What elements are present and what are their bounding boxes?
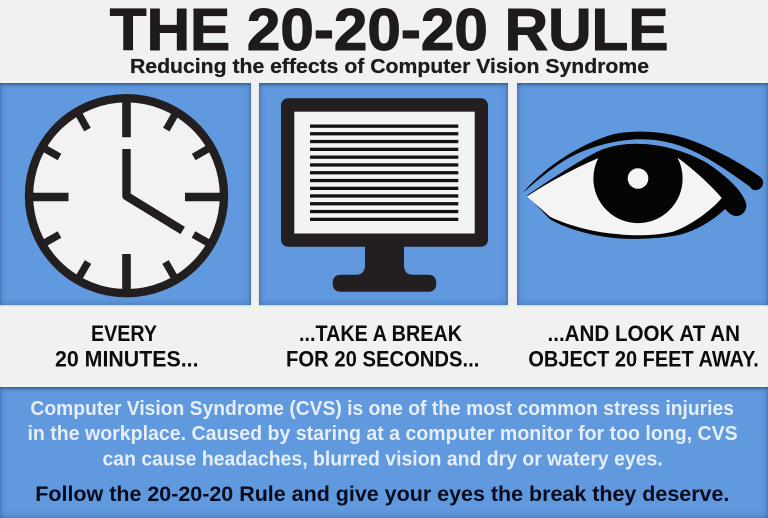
text: call to action: Follow the 20-20-20 Rule and give your eyes the break they deserve. — [35, 483, 729, 506]
icon: eye — [523, 132, 764, 239]
label: look away — [528, 322, 759, 372]
icon: clock — [24, 94, 228, 298]
panel: monitor — [259, 83, 508, 305]
text: CVS description: Computer Vision Syndrome (CVS) is one of the most common stress injuries — [30, 397, 734, 420]
label: take a break — [286, 322, 479, 372]
label: take a break: FOR 20 SECONDS... — [286, 347, 479, 372]
text: CVS description: in the workplace. Caused by staring at a computer monitor for too long, CVS — [28, 422, 738, 445]
text: CVS description — [28, 397, 738, 471]
panel: clock — [0, 83, 251, 305]
label: every 20 minutes: 20 MINUTES... — [55, 347, 198, 372]
label: every 20 minutes — [55, 322, 198, 372]
panel: explanation — [0, 387, 768, 518]
text: CVS description: can cause headaches, blurred vision and dry or watery eyes. — [102, 448, 663, 471]
icon: computer monitor — [281, 98, 488, 292]
panel: eye — [517, 83, 768, 305]
